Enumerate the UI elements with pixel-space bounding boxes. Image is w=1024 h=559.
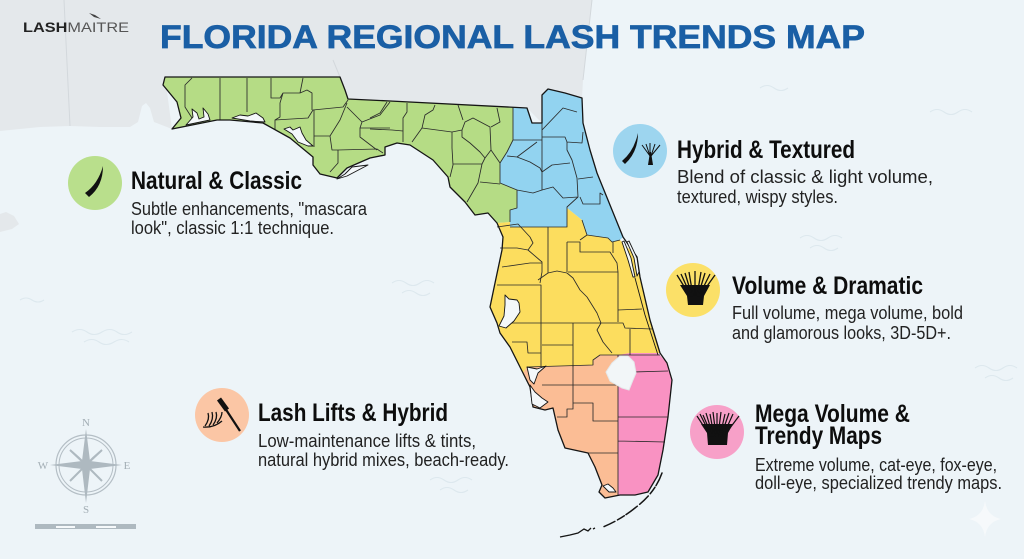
description: and glamorous looks, 3D-5D+. xyxy=(732,323,951,343)
description: Full volume, mega volume, bold xyxy=(732,303,963,323)
compass rose: W xyxy=(38,460,49,472)
heading: Natural & Classic xyxy=(131,167,302,195)
panel: volume and dramatic xyxy=(666,263,963,343)
region: southwest, lash lifts and hybrid xyxy=(523,355,618,498)
icon: single classic lash xyxy=(68,156,122,210)
description: natural hybrid mixes, beach-ready. xyxy=(258,450,509,470)
east coast barrier line xyxy=(635,278,658,355)
icon: classic lash and fan xyxy=(613,124,667,178)
region: central, volume and dramatic xyxy=(490,208,660,373)
region: southeast, mega volume and trendy maps xyxy=(618,353,672,495)
sparkle watermark xyxy=(969,501,1001,537)
panel: natural and classic xyxy=(68,156,368,238)
compass rose xyxy=(38,417,131,516)
description: Low-maintenance lifts & tints, xyxy=(258,431,476,451)
icon: lash curl and mascara wand xyxy=(195,388,249,442)
compass rose: S xyxy=(83,504,89,516)
description: Blend of classic & light volume, xyxy=(677,167,933,187)
bays and lagoons xyxy=(186,108,639,492)
compass rose: E xyxy=(124,460,131,472)
description: Subtle enhancements, "mascara xyxy=(131,199,368,219)
lake okeechobee xyxy=(606,356,636,390)
Florida map xyxy=(163,77,672,537)
logo: LASH MAITRE xyxy=(23,19,129,35)
coastline xyxy=(163,77,672,498)
heading: Hybrid & Textured xyxy=(677,136,855,164)
panel: lash lifts and hybrid xyxy=(195,388,509,470)
region: northeast, hybrid and textured xyxy=(500,89,623,242)
compass rose: N xyxy=(82,417,90,429)
heading: Volume & Dramatic xyxy=(732,272,923,300)
title: FLORIDA REGIONAL LASH TRENDS MAP xyxy=(160,19,865,55)
heading: Lash Lifts & Hybrid xyxy=(258,399,448,427)
panel: mega volume and trendy maps xyxy=(690,400,1002,493)
description: Extreme volume, cat-eye, fox-eye, xyxy=(755,455,997,475)
heading: Trendy Maps xyxy=(755,422,882,450)
description: look", classic 1:1 technique. xyxy=(131,218,334,238)
panel: hybrid and textured xyxy=(613,124,933,207)
dry tortugas islands xyxy=(560,528,595,537)
region: panhandle, natural and classic xyxy=(163,77,517,223)
florida keys xyxy=(603,473,662,527)
county lines xyxy=(185,78,668,495)
background: neighbouring land xyxy=(0,0,592,232)
icon: volume lash fan xyxy=(666,263,720,317)
description: textured, wispy styles. xyxy=(677,187,838,207)
scale bar xyxy=(35,524,136,529)
description: doll-eye, specialized trendy maps. xyxy=(755,473,1002,493)
heading: Mega Volume & xyxy=(755,400,910,428)
icon: mega volume lash fan xyxy=(690,405,744,459)
logo xyxy=(23,13,129,35)
